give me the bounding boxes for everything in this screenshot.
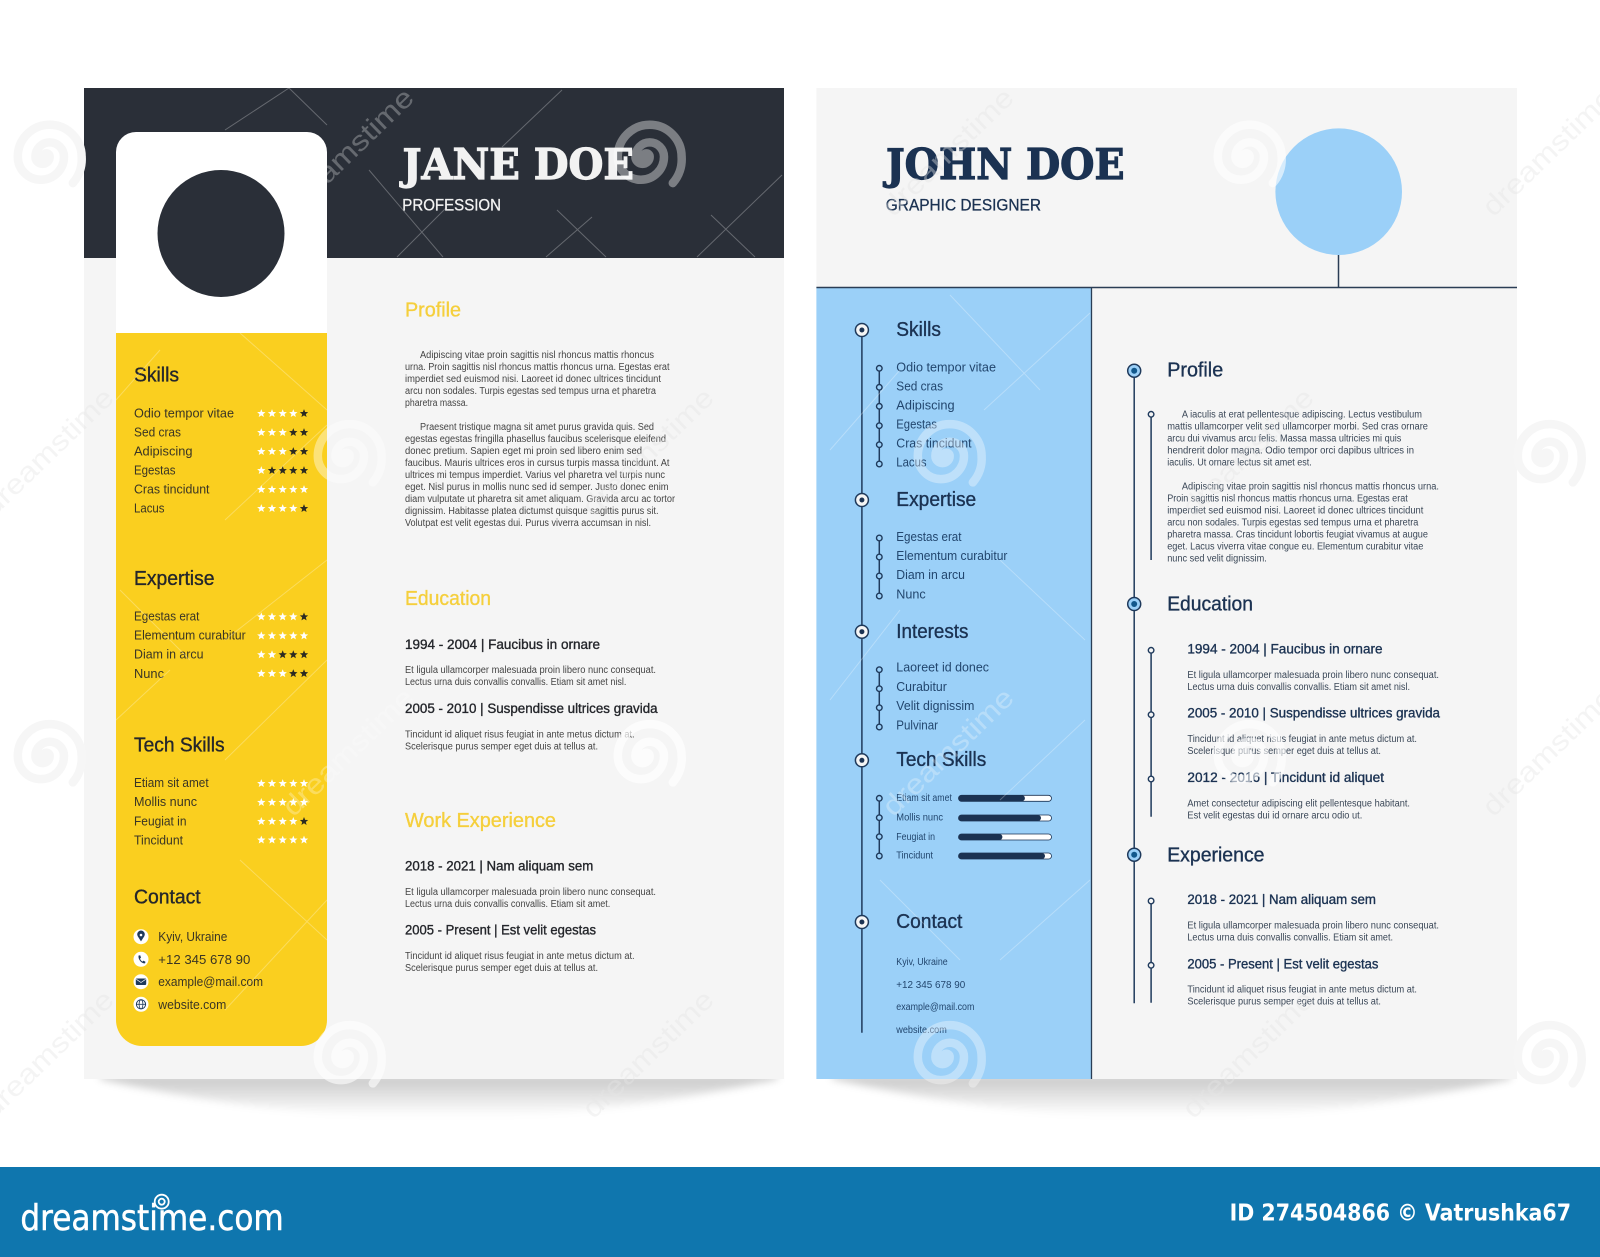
education section xyxy=(1128,594,1440,822)
photo circle with stem xyxy=(1275,128,1402,288)
expertise list: Nunc xyxy=(134,667,164,681)
profile body text: hendrerit dolor magna. Odio tempor orci dapibus ultrices in xyxy=(1167,445,1414,456)
expertise list: Egestas erat xyxy=(896,530,962,544)
work entry 2: Tincidunt id aliquet risus feugiat in ante metus dictum at. xyxy=(405,951,635,962)
expertise section xyxy=(855,489,1007,602)
expertise section xyxy=(134,568,308,681)
profile heading: Profile xyxy=(405,300,461,322)
education entry 2 xyxy=(405,701,658,752)
contact heading: Contact xyxy=(896,911,963,933)
expertise heading: Expertise xyxy=(134,568,214,590)
profile body text: dignissim. Habitasse platea dictumst quisque sagittis purus sit. xyxy=(405,506,658,517)
skills list: Cras tincidunt xyxy=(134,482,210,496)
profile body text: egestas egestas fringilla phasellus faucibus scelerisque eleifend xyxy=(405,434,666,445)
icon: mail xyxy=(134,974,148,989)
profile body text: nunc sed velit dignissim. xyxy=(1167,553,1267,564)
skills list xyxy=(876,360,996,470)
watermark text: dreamstime xyxy=(1176,382,1320,522)
expertise list xyxy=(134,610,246,681)
icon: phone xyxy=(134,952,148,967)
timeline node xyxy=(855,625,868,638)
skills heading: Skills xyxy=(896,319,941,341)
timeline node xyxy=(855,754,868,767)
profile body text: donec pretium. Sapien eget mi proin sed libero enim sed xyxy=(405,446,642,457)
profile body text: arcu non sodales. Turpis egestas sed tempus urna et pharetra xyxy=(405,386,656,397)
education entry 2: 2005 - 2010 | Suspendisse ultrices gravida xyxy=(1187,706,1440,721)
experience entry 1: Lectus urna duis convallis convallis. Etiam sit amet. xyxy=(1187,932,1393,944)
experience entry 2: 2005 - Present | Est velit egestas xyxy=(1187,956,1379,971)
contact details: website.com xyxy=(895,1025,947,1036)
footer logo: dreamstime.com xyxy=(20,1198,284,1239)
skills list: Cras tincidunt xyxy=(896,436,972,450)
skills list: Adipiscing xyxy=(896,398,955,412)
profile body text: arcu dui vivamus arcu felis. Massa massa ultricies mi quis xyxy=(1167,433,1401,444)
tech skills list xyxy=(134,776,209,848)
skills list: Egestas xyxy=(134,464,176,478)
name: JANE DOE xyxy=(399,140,634,190)
profile body text: eget. Nisl purus in mollis nunc sed id semper. Justo donec enim xyxy=(405,482,669,493)
blue sidebar xyxy=(816,288,1092,1079)
education entry 1: 1994 - 2004 | Faucibus in ornare xyxy=(1187,641,1382,656)
education entry 2: Tincidunt id aliquet risus feugiat in ante metus dictum at. xyxy=(1187,734,1417,745)
profile body text: faucibus. Mauris ultrices eros in cursus turpis massa tincidunt. At xyxy=(405,458,670,469)
watermark text: dreamstime xyxy=(876,682,1020,822)
profile body text: Proin sagittis nisl rhoncus mattis rhoncus urna. Egestas erat xyxy=(1167,493,1408,504)
profile body text: pharetra massa. Cras tincidunt lobortis feugiat vivamus at augue xyxy=(1167,529,1428,540)
education entry 1: Et ligula ullamcorper malesuada proin libero nunc consequat. xyxy=(1187,670,1439,681)
expertise list: Diam in arcu xyxy=(896,568,965,582)
interests list: Curabitur xyxy=(896,680,947,694)
contact details: website.com xyxy=(157,998,226,1012)
experience entry 2 xyxy=(1148,956,1417,1008)
timeline node xyxy=(855,916,868,928)
education entry 2: Scelerisque purus semper eget duis at tellus at. xyxy=(1187,746,1381,757)
profile body text: diam vulputate ut pharetra sit amet aliquam. Gravida arcu ac tortor xyxy=(405,494,676,505)
skills heading: Skills xyxy=(134,365,179,387)
skills list: Odio tempor vitae xyxy=(134,406,234,420)
experience entry 2: Tincidunt id aliquet risus feugiat in ante metus dictum at. xyxy=(1187,985,1417,996)
tech skills star ratings xyxy=(257,779,308,844)
footer bar xyxy=(0,1167,1600,1257)
education entry 3: Amet consectetur adipiscing elit pellentesque habitant. xyxy=(1187,798,1410,810)
sheet background xyxy=(84,88,784,1079)
experience entry 2: Scelerisque purus semper eget duis at tellus at. xyxy=(1187,997,1381,1008)
interests list: Laoreet id donec xyxy=(896,660,989,674)
work entry 2 xyxy=(405,923,635,974)
skills list: Odio tempor vitae xyxy=(896,360,996,374)
skills section xyxy=(134,365,308,516)
education entry 3: Est velit egestas dui id ornare arcu odio ut. xyxy=(1187,810,1362,822)
expertise list: Diam in arcu xyxy=(134,648,204,662)
watermark text: dreamstime xyxy=(576,984,720,1124)
profile section xyxy=(405,300,676,529)
interests list: Velit dignissim xyxy=(896,699,974,713)
job title: GRAPHIC DESIGNER xyxy=(886,197,1041,215)
profile body text: eget. Lacus viverra vitae congue eu. Elementum curabitur vitae xyxy=(1167,541,1424,552)
name: JOHN DOE xyxy=(882,140,1124,190)
education entry 2: Scelerisque purus semper eget duis at tellus at. xyxy=(405,742,598,752)
interests heading: Interests xyxy=(896,621,968,643)
yellow sidebar xyxy=(116,333,327,1046)
work entry 1: Et ligula ullamcorper malesuada proin libero nunc consequat. xyxy=(405,887,656,898)
work entry 1 xyxy=(405,859,656,910)
contact details: example@mail.com xyxy=(158,975,263,989)
skills list: Sed cras xyxy=(896,380,943,394)
profile body text xyxy=(1167,409,1439,564)
work entry 2: Scelerisque purus semper eget duis at tellus at. xyxy=(405,963,598,974)
skills list: Lacus xyxy=(896,456,927,470)
sidebar card xyxy=(116,132,327,1046)
expertise list xyxy=(876,530,1007,602)
skills list: Egestas xyxy=(896,418,937,432)
contact details xyxy=(895,957,974,1036)
profile body text: imperdiet sed euismod nisi. Laoreet id donec ultrices tincidunt xyxy=(405,374,661,385)
skills list: Sed cras xyxy=(134,426,181,440)
skills section xyxy=(855,319,996,470)
interests list: Pulvinar xyxy=(896,718,938,732)
contact details xyxy=(157,930,263,1012)
profile body text: urna. Proin sagittis nisl rhoncus mattis rhoncus urna. Egestas erat xyxy=(405,362,670,373)
tech skills list: Mollis nunc xyxy=(134,795,197,809)
experience entry 1: 2018 - 2021 | Nam aliquam sem xyxy=(1187,892,1376,907)
tech skills heading: Tech Skills xyxy=(134,734,225,756)
watermark text: dreamstime xyxy=(1476,682,1600,822)
profile body text: Volutpat est velit egestas dui. Purus viverra accumsan in nisl. xyxy=(405,518,651,529)
profile body text: A iaculis at erat pellentesque adipiscing. Lectus vestibulum xyxy=(1182,409,1422,420)
contact details: example@mail.com xyxy=(896,1002,974,1013)
education entry 1 xyxy=(405,637,656,688)
work entry 1: Lectus urna duis convallis convallis. Etiam sit amet. xyxy=(405,899,610,910)
skill bars xyxy=(958,795,1052,859)
timeline node xyxy=(855,324,868,336)
work entry 2: 2005 - Present | Est velit egestas xyxy=(405,923,596,938)
expertise list: Egestas erat xyxy=(134,610,200,624)
watermark text: dreamstime xyxy=(1176,984,1320,1124)
experience entry 1: Et ligula ullamcorper malesuada proin libero nunc consequat. xyxy=(1187,920,1439,932)
profile body text: iaculis. Ut ornare lectus sit amet est. xyxy=(1167,457,1312,468)
education entry 1: Lectus urna duis convallis convallis. Etiam sit amet nisl. xyxy=(1187,682,1410,693)
education entry 1: 1994 - 2004 | Faucibus in ornare xyxy=(405,637,600,652)
contact heading: Contact xyxy=(134,887,201,909)
education entry 2 xyxy=(1148,706,1440,757)
watermark text: dreamstime xyxy=(1476,82,1600,222)
education entry 1: Lectus urna duis convallis convallis. Etiam sit amet nisl. xyxy=(405,677,626,688)
timeline node xyxy=(1128,848,1141,861)
icon: globe xyxy=(134,997,148,1012)
profile body text: ultrices mi tempus imperdiet. Varius vel pharetra vel turpis nunc xyxy=(405,470,665,481)
tech skills list: Mollis nunc xyxy=(896,812,943,824)
icon: location pin xyxy=(134,929,148,944)
experience section xyxy=(1128,844,1439,1008)
education section xyxy=(405,588,658,752)
expertise list: Nunc xyxy=(896,588,926,602)
profession: PROFESSION xyxy=(402,197,501,215)
logo spiral xyxy=(155,1195,169,1209)
profile section xyxy=(1128,360,1439,564)
timeline node xyxy=(1128,364,1141,377)
expertise list: Elementum curabitur xyxy=(896,549,1007,563)
skills list: Lacus xyxy=(134,502,164,516)
timeline node xyxy=(855,494,868,506)
experience heading: Experience xyxy=(1167,844,1264,866)
education entry 1 xyxy=(1148,641,1439,693)
skills list xyxy=(134,406,234,516)
tech skills list: Tincidunt xyxy=(134,834,184,848)
contact details: Kyiv, Ukraine xyxy=(896,957,948,968)
expertise heading: Expertise xyxy=(896,489,976,511)
contact section xyxy=(855,911,974,1036)
divider lines xyxy=(816,288,1517,1079)
education heading: Education xyxy=(405,588,491,610)
watermark text: dreamstime xyxy=(276,682,420,822)
resume: Jane Doe xyxy=(84,88,784,1079)
profile body text xyxy=(405,350,676,529)
tech skills section xyxy=(134,734,308,848)
work experience section xyxy=(405,810,656,974)
watermark text: dreamstime xyxy=(876,82,1020,222)
education entry 1: Et ligula ullamcorper malesuada proin libero nunc consequat. xyxy=(405,665,656,676)
experience entry 1 xyxy=(1148,892,1439,944)
dark header band xyxy=(84,88,784,258)
watermark text: dreamstime xyxy=(576,382,720,522)
education heading: Education xyxy=(1167,594,1253,616)
contact details: +12 345 678 90 xyxy=(158,953,250,967)
sidebar timeline xyxy=(862,330,879,1033)
tech skills heading: Tech Skills xyxy=(896,749,986,771)
interests section xyxy=(855,621,989,732)
resume: John Doe xyxy=(816,88,1517,1079)
profile body text: Adipiscing vitae proin sagittis nisl rhoncus mattis rhoncus xyxy=(420,350,654,361)
tech skills list: Feugiat in xyxy=(896,832,935,843)
watermark text: dreamstime xyxy=(276,82,420,222)
watermark spirals xyxy=(18,125,1582,1083)
sheet background xyxy=(816,88,1517,1079)
profile body text: Praesent tristique magna sit amet purus gravida quis. Sed xyxy=(420,422,654,433)
skills star ratings xyxy=(257,409,308,512)
page shadows xyxy=(100,1075,1511,1117)
profile body text: arcu non sodales. Turpis egestas sed tempus urna et pharetra xyxy=(1167,517,1419,528)
tech skills list xyxy=(876,793,952,862)
education entry 2: 2005 - 2010 | Suspendisse ultrices gravida xyxy=(405,701,658,716)
sub node xyxy=(1148,412,1154,417)
contact details: +12 345 678 90 xyxy=(896,980,966,991)
education entry 2: Tincidunt id aliquet risus feugiat in ante metus dictum at. xyxy=(405,730,635,740)
timeline node xyxy=(1128,598,1141,610)
tech skills section xyxy=(855,749,1052,862)
education entry 3 xyxy=(1148,770,1410,822)
education entry 3: 2012 - 2016 | Tincidunt id aliquet xyxy=(1187,770,1384,785)
photo circle xyxy=(158,170,284,297)
main timeline xyxy=(1134,371,1151,1003)
white photo card xyxy=(116,132,327,333)
expertise star ratings xyxy=(257,612,308,677)
tech skills list: Etiam sit amet xyxy=(134,776,209,790)
tech skills list: Feugiat in xyxy=(134,814,187,828)
profile body text: mattis ullamcorper velit sed ullamcorper morbi. Sed cras ornare xyxy=(1167,421,1428,432)
profile body text: pharetra massa. xyxy=(405,398,468,409)
skills list: Adipiscing xyxy=(134,444,193,458)
contact details: Kyiv, Ukraine xyxy=(158,930,227,944)
profile body text: imperdiet sed euismod nisi. Laoreet id donec ultrices tincidunt xyxy=(1167,505,1424,516)
work entry 1: 2018 - 2021 | Nam aliquam sem xyxy=(405,859,593,874)
interests list xyxy=(876,660,989,732)
work experience heading: Work Experience xyxy=(405,810,556,832)
tech skills list: Tincidunt xyxy=(896,850,933,862)
contact section xyxy=(134,887,263,1012)
expertise list: Elementum curabitur xyxy=(134,628,246,642)
profile body text: Adipiscing vitae proin sagittis nisl rhoncus mattis rhoncus urna. xyxy=(1182,481,1439,492)
profile heading: Profile xyxy=(1167,360,1223,382)
tech skills list: Etiam sit amet xyxy=(896,793,952,804)
